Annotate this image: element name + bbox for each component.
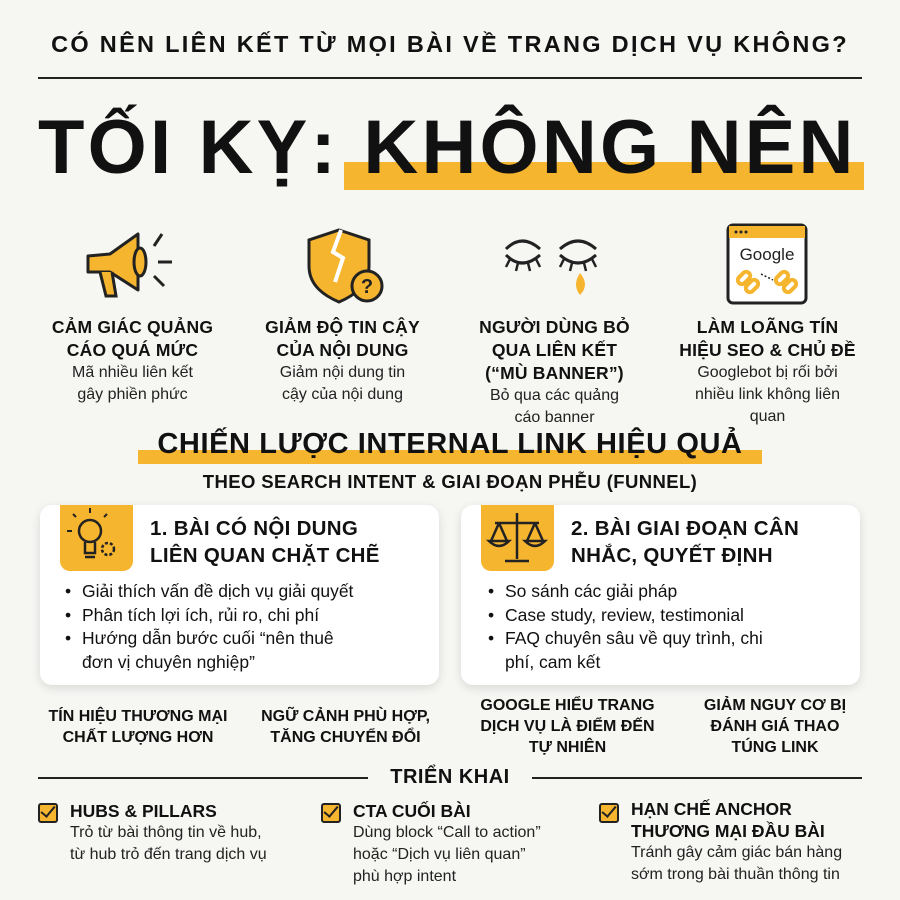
column: tin cậy: Giảm nội dung tin [280,364,405,381]
item: anchor: Tránh gây cảm giác bán hàng [631,844,842,861]
label: thao túng: TÚNG LINK [731,739,819,756]
column: seo: quan [750,408,785,425]
label: google: TỰ NHIÊN [529,739,606,756]
label: tín hiệu: CHẤT LƯỢNG HƠN [63,729,213,746]
column: tin cậy: cậy của nội dung [282,386,403,403]
subtitle: THEO SEARCH INTENT & GIAI ĐOẠN PHỄU (FUNNEL) [203,471,697,492]
label: thao túng [704,696,846,756]
item: cta: CTA CUỐI BÀI [353,801,471,821]
card 1: Hướng dẫn bước cuối “nên thuê [82,628,334,648]
item: cta: phù hợp intent [353,868,456,885]
column: quảng cáo: CẢM GIÁC QUẢNG [52,317,213,337]
item: hubs: HUBS & PILLARS [70,801,217,821]
icon: megaphone [86,232,172,298]
icon: scales [481,505,554,571]
label: tín hiệu: TÍN HIỆU THƯƠNG MẠI [49,708,227,725]
column: seo: LÀM LOÃNG TÍN [697,317,838,337]
icon: google window [726,224,808,304]
icon: broken shield [308,228,384,304]
column: quảng cáo: CÁO QUÁ MỨC [67,340,198,360]
card 2: So sánh các giải pháp [505,581,677,601]
item: anchor [599,799,842,883]
column: tin cậy: GIẢM ĐỘ TIN CẬY [265,317,420,337]
label: google: DỊCH VỤ LÀ ĐIỂM ĐẾN [480,718,655,735]
icon: bulb [60,505,133,571]
icon: google window: Google [740,245,794,264]
card 2 [461,505,860,685]
label: thao túng: GIẢM NGUY CƠ BỊ [704,697,846,714]
column: quảng cáo: gây phiền phức [77,386,188,403]
icon: broken shield: ? [361,276,373,298]
section heading: CHIẾN LƯỢC INTERNAL LINK HIỆU QUẢ [157,428,743,460]
column: banner: cáo banner [514,409,595,426]
label: google: GOOGLE HIỂU TRANG [480,697,655,714]
column: banner: (“MÙ BANNER”) [485,363,624,383]
item: cta: Dùng block “Call to action” [353,824,541,841]
item: hubs: từ hub trỏ đến trang dịch vụ [70,846,267,863]
column: seo [679,317,856,425]
column: seo: Googlebot bị rối bởi [697,364,838,381]
column: banner: Bỏ qua các quảng [490,387,619,404]
card 2: phí, cam kết [505,652,600,672]
label: ngữ cảnh [261,706,430,746]
label: thao túng: ĐÁNH GIÁ THAO [711,718,839,735]
heading: triển khai: TRIỂN KHAI [390,766,510,788]
card 1: 1. BÀI CÓ NỘI DUNG [150,517,358,540]
icon: closed eyes [504,239,598,295]
card 1: Phân tích lợi ích, rủi ro, chi phí [82,604,319,624]
item: anchor: THƯƠNG MẠI ĐẦU BÀI [631,821,825,841]
column: tin cậy [265,317,420,403]
item: anchor: sớm trong bài thuần thông tin [631,866,840,883]
card 1: đơn vị chuyên nghiệp” [82,652,255,672]
item: cta: hoặc “Dịch vụ liên quan” [353,846,526,863]
title: CÓ NÊN LIÊN KẾT TỪ MỌI BÀI VỀ TRANG DỊCH VỤ KHÔNG? [51,31,849,57]
card 2: 2. BÀI GIAI ĐOẠN CÂN [571,517,799,540]
column: quảng cáo [52,317,213,403]
card 1 [40,505,439,685]
column: seo: HIỆU SEO & CHỦ ĐỀ [679,340,856,360]
column: tin cậy: CỦA NỘI DUNG [276,340,409,360]
column: banner [479,317,630,426]
label: google [480,696,655,756]
label: ngữ cảnh: NGỮ CẢNH PHÙ HỢP, [261,708,430,725]
card 2: NHẮC, QUYẾT ĐỊNH [571,544,773,567]
headline: TỐI KỴ: KHÔNG NÊN [38,105,857,190]
column: banner: NGƯỜI DÙNG BỎ [479,317,630,337]
column: quảng cáo: Mã nhiều liên kết [72,364,193,381]
item: hubs: Trỏ từ bài thông tin về hub, [70,824,262,841]
card 2: Case study, review, testimonial [505,604,744,624]
item: anchor: HẠN CHẾ ANCHOR [631,799,792,819]
item: hubs [38,801,267,863]
card 1: Giải thích vấn đề dịch vụ giải quyết [82,581,353,601]
item: cta [321,801,541,885]
card 1: LIÊN QUAN CHẶT CHẼ [150,544,380,567]
label: tín hiệu [48,706,227,746]
card 2: FAQ chuyên sâu về quy trình, chi [505,628,763,648]
label: ngữ cảnh: TĂNG CHUYỂN ĐỔI [270,729,421,746]
column: seo: nhiều link không liên [695,386,840,403]
column: banner: QUA LIÊN KẾT [492,340,617,360]
